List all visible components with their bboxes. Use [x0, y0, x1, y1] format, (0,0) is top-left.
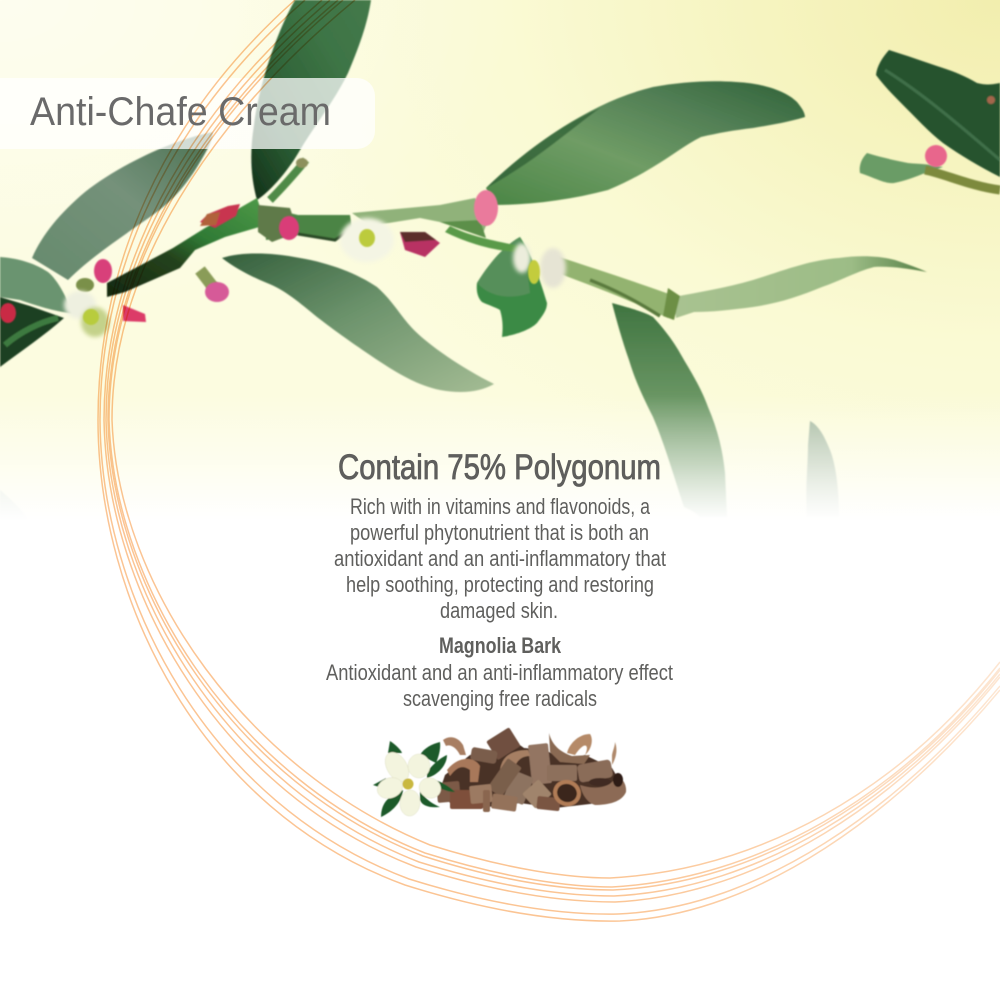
leaf: small tall — [806, 421, 839, 517]
leaf: top upright — [251, 0, 371, 200]
leaf: top right dark — [876, 50, 1000, 177]
text block: magnolia description: scavenging free radicals — [403, 686, 597, 711]
title pill — [0, 78, 375, 149]
bark shadow base — [440, 738, 622, 808]
leaf: far left — [0, 257, 72, 313]
leaf: long right — [674, 256, 927, 318]
leaf: right sprig — [860, 153, 943, 183]
leaf: hanging down — [612, 303, 727, 517]
stem: main — [107, 198, 266, 297]
stem: sheath up — [352, 198, 490, 236]
leaf: upper right large — [486, 81, 805, 205]
stem: middle — [264, 207, 352, 240]
stem: lower — [445, 226, 520, 252]
magnolia leaves — [373, 741, 455, 817]
flower right — [513, 243, 566, 288]
heading: Contain 75% Polygonum — [338, 448, 661, 487]
stem: right sprig — [925, 170, 1000, 190]
title: Anti-Chafe Cream — [30, 90, 331, 134]
text block: polygonum description: help soothing, protecting and restoring — [346, 572, 654, 597]
flower middle — [340, 218, 394, 262]
leaf: far left pale — [0, 490, 28, 520]
text block: polygonum description: Rich with in vitamins and flavonoids, a — [350, 494, 650, 519]
bark pieces — [436, 727, 626, 812]
leaf: left grey-green — [32, 132, 213, 280]
bud stalk left — [76, 278, 94, 292]
subheading: Magnolia Bark — [439, 633, 561, 658]
text block: polygonum description: damaged skin. — [440, 598, 558, 623]
flowers — [64, 218, 566, 337]
stem: right pale — [553, 255, 672, 318]
magnolia centre — [402, 778, 414, 790]
plant photograph — [0, 0, 1000, 520]
text block: magnolia description — [326, 660, 674, 711]
text block: polygonum description: powerful phytonutrient that is both an — [350, 520, 649, 545]
buds: pink — [0, 145, 947, 323]
dark sprig lower left — [0, 297, 64, 367]
small shoot above joint — [270, 160, 306, 200]
flower left — [64, 291, 109, 337]
text block: polygonum description — [334, 494, 667, 623]
text block: polygonum description: antioxidant and an anti-inflammatory that — [334, 546, 667, 571]
bud stalk — [200, 270, 213, 287]
magnolia petals — [374, 748, 444, 817]
leaf shading — [486, 108, 600, 188]
leaf: curled — [477, 237, 547, 337]
fade to white — [0, 395, 1000, 521]
leaf: lower large — [222, 254, 494, 392]
bud cluster node — [258, 205, 298, 242]
bark curls — [443, 737, 466, 755]
flower centres — [83, 229, 540, 325]
image: magnolia flower and bark — [373, 727, 626, 817]
text block: magnolia description: Antioxidant and an anti-inflammatory effect — [326, 660, 674, 685]
